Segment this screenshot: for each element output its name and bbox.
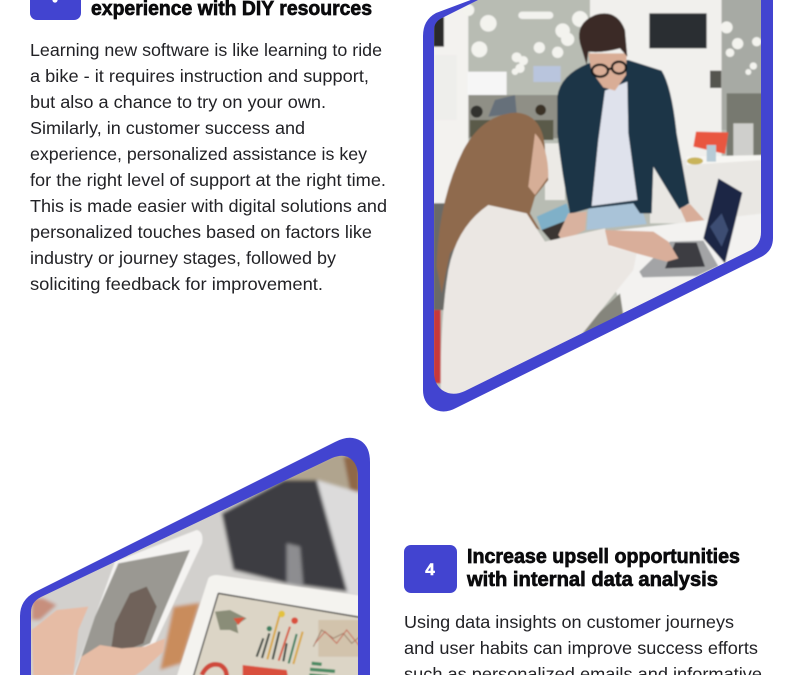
bokeh ceiling lights	[462, 4, 761, 75]
tablet on back table	[537, 203, 572, 230]
number badge 4: 4	[425, 560, 435, 579]
text block: step 3 body: soliciting feedback for improvement.	[30, 274, 323, 294]
green bars	[309, 663, 335, 675]
number badge 3	[30, 0, 81, 20]
panel: dashboard photo in blue hexagon frame	[20, 438, 370, 675]
donut and red bar	[202, 664, 227, 675]
blurred background	[27, 450, 363, 675]
text block: step 3 body: industry or journey stages, followed by	[30, 248, 336, 268]
panel: office photo in blue hexagon frame	[420, 0, 773, 412]
laptop	[639, 178, 742, 277]
number badge 4	[404, 545, 457, 593]
bar chart	[257, 613, 303, 664]
woman	[433, 113, 678, 400]
text block: step 4 body: Using data insights on customer journeys	[404, 612, 734, 632]
text block: step 3 body: a bike - it requires instruction and support,	[30, 66, 369, 86]
text block: step 3 body: experience, personalized assistance is key	[30, 144, 367, 164]
hands holding tablet	[32, 607, 165, 675]
text block: step 3 body: Learning new software is like learning to ride	[30, 40, 382, 60]
heading: step 4	[466, 545, 740, 591]
text block: step 3 body: personalized touches based on factors like	[30, 222, 372, 242]
office background	[434, 0, 761, 390]
red chair and desk items	[687, 132, 728, 165]
world map	[215, 610, 247, 633]
text block: step 4 body: and user habits can improve success efforts	[404, 638, 758, 658]
line chart	[318, 620, 360, 657]
laptop with charts	[177, 575, 360, 675]
foreground desk	[610, 214, 761, 314]
text block: step 3 body: for the right level of support at the right time.	[30, 170, 386, 190]
shadow under desk	[582, 293, 624, 333]
heading: step 4: with internal data analysis	[466, 568, 718, 591]
text block: step 3 body	[30, 40, 387, 294]
text block: step 3 body: This is made easier with digital solutions and	[30, 196, 387, 216]
heading: step 4: Increase upsell opportunities	[467, 545, 740, 568]
text block: step 3 body: Similarly, in customer success and	[30, 118, 305, 138]
text block: step 4 body	[404, 612, 762, 675]
text block: step 3 body: but also a chance to try on your own.	[30, 92, 326, 112]
man	[557, 13, 707, 242]
tablet	[73, 530, 202, 675]
wall TV	[649, 13, 707, 48]
